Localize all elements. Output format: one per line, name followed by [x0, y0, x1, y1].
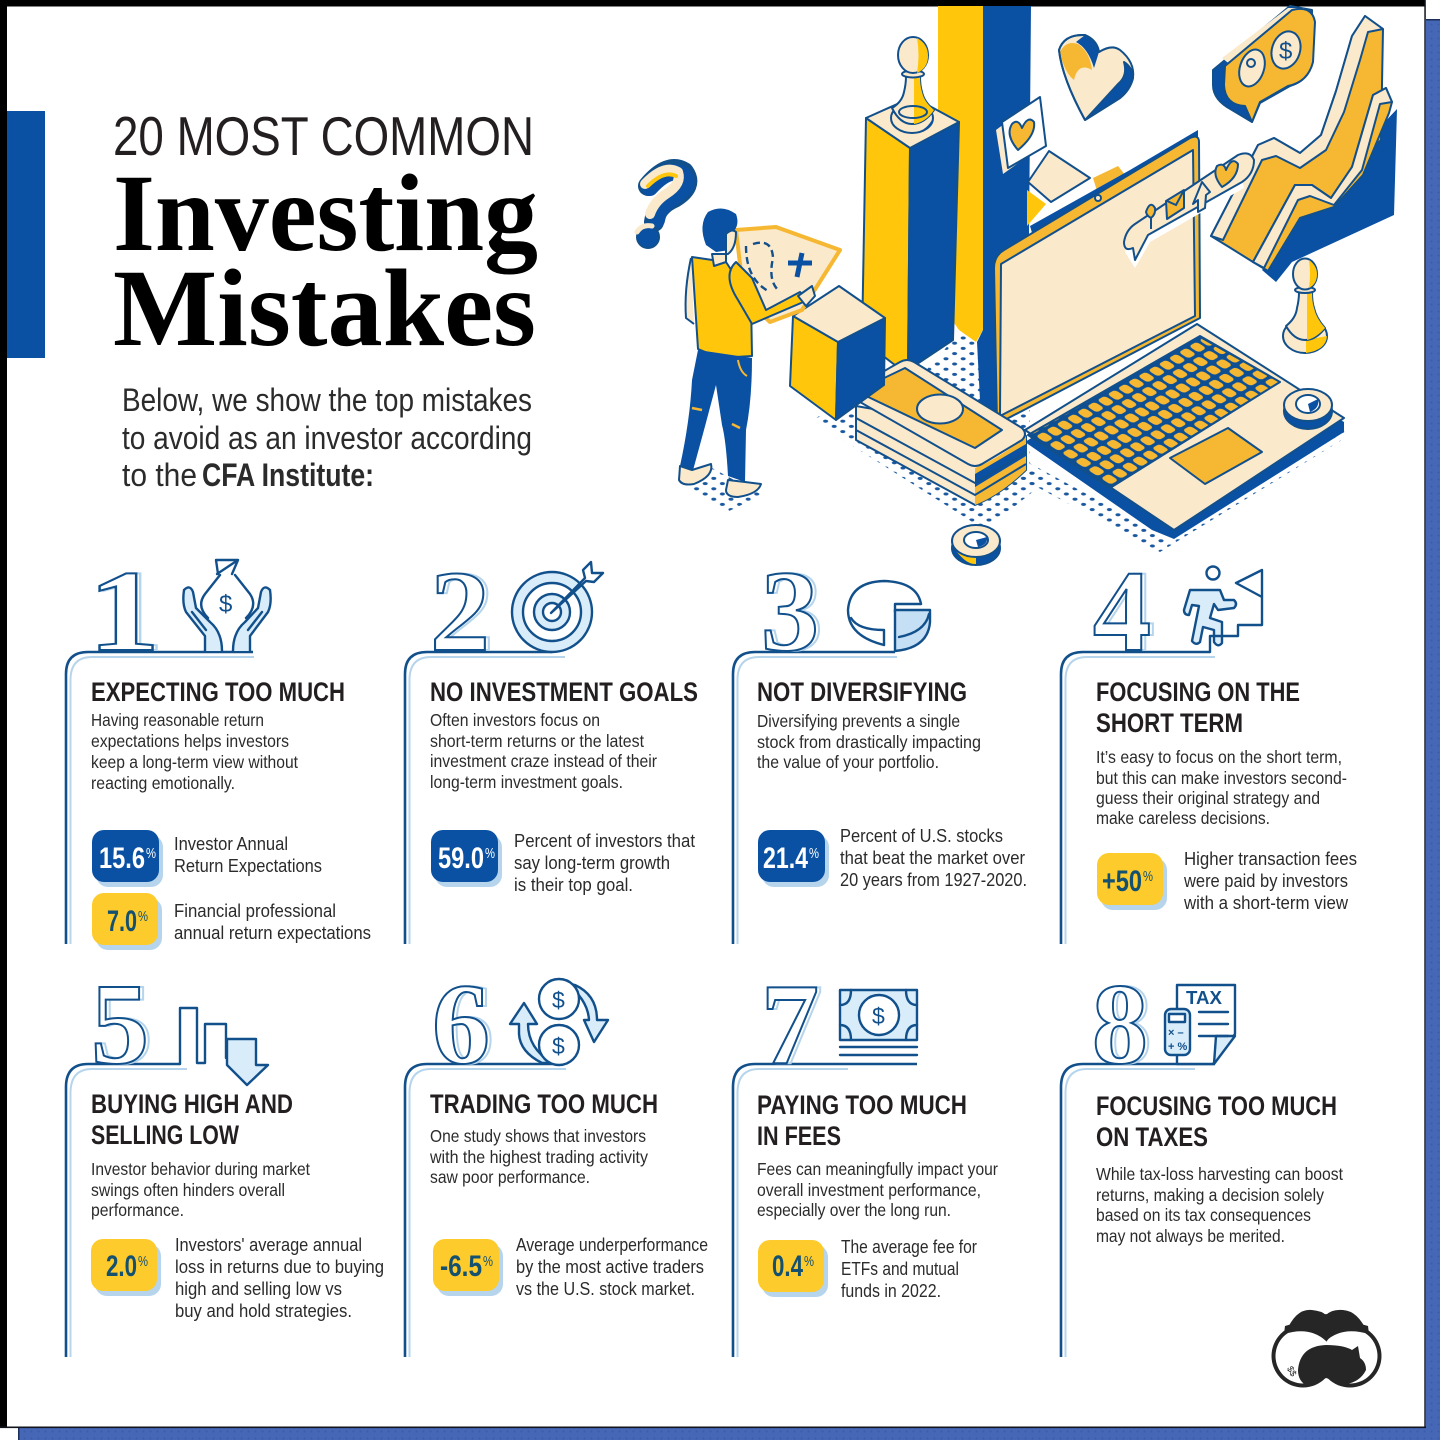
- description: but this can make investors second-: [1096, 768, 1347, 788]
- heading: NOT DIVERSIFYING: [757, 677, 967, 707]
- stat badge 7.0%: %: [138, 908, 148, 925]
- icon: tax document and calculator: + %: [1168, 1041, 1187, 1053]
- icon: hands holding money bag: [183, 560, 271, 651]
- stat badge 7.0%: [92, 893, 162, 950]
- heading: FOCUSING ON THE: [1096, 677, 1300, 707]
- description: swings often hinders overall: [91, 1180, 285, 1200]
- stat label: Return Expectations: [174, 855, 322, 876]
- description: guess their original strategy and: [1096, 788, 1320, 808]
- description: [429, 1126, 648, 1187]
- frame: [405, 652, 565, 944]
- title: Mistakes: [113, 247, 536, 369]
- description: [91, 1159, 310, 1220]
- icon: tax document and calculator: × –: [1168, 1027, 1184, 1039]
- logo: binoculars and piggy bank: [1272, 1310, 1382, 1388]
- stat badge 15.6%: 15.6: [99, 842, 145, 875]
- description: stock from drastically impacting: [757, 732, 981, 752]
- description: performance.: [91, 1200, 184, 1220]
- stat badge 7.0%: 7.0: [107, 905, 137, 938]
- stat badge +50%: %: [1143, 868, 1153, 885]
- stat badge 21.4%: %: [809, 845, 819, 862]
- front bar with pawn: [862, 97, 959, 375]
- description: Having reasonable return: [91, 710, 264, 730]
- description: Often investors focus on: [430, 710, 600, 730]
- description: investment craze instead of their: [430, 751, 657, 771]
- map: [736, 227, 840, 322]
- stat label: [840, 825, 1027, 890]
- subtitle: [122, 382, 532, 493]
- subtitle: to avoid as an investor according: [122, 420, 532, 456]
- stat label: Average underperformance: [516, 1234, 708, 1255]
- icon: circulating dollar coins: [510, 979, 608, 1065]
- stat label: funds in 2022.: [841, 1280, 941, 1301]
- frame: [1061, 652, 1215, 944]
- shoes: [679, 464, 711, 484]
- stat badge -6.5%: -6.5: [440, 1250, 482, 1283]
- stat badge 59.0%: [431, 830, 502, 887]
- stat label: [174, 833, 322, 876]
- stat label: vs the U.S. stock market.: [516, 1278, 695, 1299]
- panel: 5 buying high and selling low: [66, 961, 384, 1357]
- heading: [757, 1090, 967, 1151]
- heading: EXPECTING TOO MUCH: [91, 677, 345, 707]
- stat badge 15.6%: [92, 830, 163, 887]
- icon: banknote stack: [840, 990, 917, 1055]
- description: overall investment performance,: [757, 1180, 981, 1200]
- description: [757, 1159, 998, 1220]
- stat label: Investors' average annual: [175, 1234, 362, 1255]
- stat label: were paid by investors: [1183, 870, 1348, 891]
- stat label: [175, 1234, 384, 1321]
- stat badge -6.5%: [433, 1239, 503, 1296]
- question mark: [637, 169, 687, 248]
- tall back bar: [938, 6, 1031, 420]
- stat badge 0.4%: [758, 1240, 828, 1297]
- wave graph strips: [1211, 16, 1397, 282]
- stat label: is their top goal.: [514, 874, 633, 895]
- heading: [91, 1089, 293, 1150]
- laptop base: [1025, 324, 1344, 539]
- stat label: buy and hold strategies.: [175, 1300, 352, 1321]
- arm: [729, 262, 808, 324]
- description: long-term investment goals.: [430, 772, 623, 792]
- stat badge 21.4%: 21.4: [763, 842, 808, 875]
- description: Diversifying prevents a single: [757, 711, 960, 731]
- heading: [1096, 1091, 1337, 1152]
- numeral 1: 1: [88, 548, 160, 676]
- stat label: [514, 830, 695, 895]
- panel: 1 expecting too much: [66, 548, 371, 950]
- chat strip icons: [1124, 153, 1254, 268]
- pawn on bar: [891, 37, 934, 133]
- icon: tax document and calculator: [1165, 985, 1235, 1064]
- icon: tax document and calculator: TAX: [1186, 988, 1222, 1008]
- stat label: with a short-term view: [1183, 892, 1349, 913]
- description: [1096, 747, 1347, 828]
- numeral 4: 4: [1093, 548, 1151, 676]
- stat badge 21.4%: [758, 830, 829, 887]
- stat label: Higher transaction fees: [1184, 848, 1357, 869]
- heading: FOCUSING TOO MUCH: [1096, 1091, 1337, 1121]
- pawn right: [1283, 258, 1327, 353]
- cube: [790, 286, 885, 420]
- numeral 5: 5: [91, 961, 149, 1089]
- description: [91, 710, 298, 793]
- description: One study shows that investors: [430, 1126, 646, 1146]
- head: [702, 208, 737, 252]
- description: the value of your portfolio.: [757, 752, 939, 772]
- stat label: that beat the market over: [840, 847, 1025, 868]
- heading: IN FEES: [757, 1121, 841, 1151]
- subtitle: to the: [122, 457, 197, 493]
- accent bar: [7, 111, 45, 358]
- description: Investor behavior during market: [91, 1159, 310, 1179]
- subtitle: CFA Institute:: [202, 457, 374, 493]
- description: based on its tax consequences: [1096, 1205, 1311, 1225]
- heading: SELLING LOW: [91, 1120, 239, 1150]
- torso: [692, 257, 752, 358]
- stat label: Percent of U.S. stocks: [840, 825, 1003, 846]
- heading: NO INVESTMENT GOALS: [430, 677, 698, 707]
- description: It’s easy to focus on the short term,: [1096, 747, 1342, 767]
- panel: 3 not diversifying: [733, 548, 1027, 944]
- stat label: [516, 1234, 708, 1299]
- panel: 2 no investment goals: [405, 548, 698, 944]
- description: may not always be merited.: [1096, 1226, 1285, 1246]
- stat badge 2.0%: %: [138, 1253, 148, 1270]
- stat badge 15.6%: %: [146, 845, 156, 862]
- icon: target with arrow: [512, 562, 603, 652]
- subtitle: Below, we show the top mistakes: [122, 382, 532, 418]
- numeral 7: 7: [761, 961, 819, 1089]
- numeral 2: 2: [430, 548, 490, 676]
- stat badge -6.5%: %: [483, 1253, 493, 1270]
- description: with the highest trading activity: [429, 1147, 648, 1167]
- description: While tax-loss harvesting can boost: [1096, 1164, 1343, 1184]
- numeral 6: 6: [432, 961, 490, 1089]
- man with map: [637, 169, 840, 497]
- icon: climbing figure with flag: [1184, 566, 1262, 652]
- description: make careless decisions.: [1096, 808, 1270, 828]
- stat label: [841, 1236, 977, 1301]
- description: returns, making a decision solely: [1096, 1185, 1324, 1205]
- title: Investing: [113, 152, 538, 274]
- sticky note heart: [996, 97, 1046, 174]
- stat label: Investor Annual: [174, 833, 288, 854]
- description: expectations helps investors: [91, 731, 289, 751]
- stat label: ETFs and mutual: [841, 1258, 959, 1279]
- description: [1096, 1164, 1343, 1246]
- stat badge 2.0%: 2.0: [106, 1250, 137, 1283]
- description: keep a long-term view without: [91, 752, 298, 772]
- numeral 6: 6: [436, 961, 494, 1089]
- white box behind laptop: [1027, 130, 1198, 260]
- numeral 3: 3: [761, 548, 819, 676]
- numeral 1: 1: [92, 548, 164, 676]
- stat label: [174, 900, 371, 943]
- stat badge 0.4%: %: [804, 1253, 814, 1270]
- icon: banknote stack: $: [872, 1003, 885, 1029]
- icon: circulating dollar coins: $: [552, 987, 565, 1013]
- donut on laptop: [1284, 389, 1332, 429]
- numeral 8: 8: [1092, 961, 1148, 1089]
- map-pin and dollar chat bubble: [1213, 6, 1315, 122]
- map-pin and dollar chat bubble: $: [1279, 38, 1292, 65]
- frame: [66, 1064, 187, 1357]
- frame: [66, 652, 254, 944]
- icon: pie chart: [848, 581, 930, 651]
- description: Fees can meaningfully impact your: [757, 1159, 998, 1179]
- heading: ON TAXES: [1096, 1122, 1208, 1152]
- hero illustration: [637, 6, 1397, 565]
- heading: TRADING TOO MUCH: [430, 1089, 658, 1119]
- heading: BUYING HIGH AND: [91, 1089, 293, 1119]
- frame: [733, 1064, 917, 1357]
- logo: binoculars and piggy bank: $$: [1285, 1364, 1299, 1378]
- title: [113, 105, 538, 369]
- heart balloon: [1059, 35, 1133, 120]
- description: saw poor performance.: [430, 1167, 590, 1187]
- panel: 7 paying too much in fees: [733, 961, 998, 1357]
- panel: 6 trading too much: [405, 961, 708, 1357]
- stat label: Financial professional: [174, 900, 336, 921]
- numeral 4: 4: [1097, 548, 1155, 676]
- stat badge +50%: +50: [1102, 865, 1142, 898]
- stat label: say long-term growth: [514, 852, 670, 873]
- stat badge 0.4%: 0.4: [772, 1250, 803, 1283]
- title: 20 MOST COMMON: [113, 105, 534, 167]
- description: [757, 711, 981, 772]
- stat label: The average fee for: [841, 1236, 977, 1257]
- heading: [1096, 677, 1300, 738]
- frame: [1061, 1064, 1215, 1357]
- halftone floor dots: [682, 332, 1345, 552]
- panel: 4 focusing on the short term: [1061, 548, 1357, 944]
- description: especially over the long run.: [757, 1200, 951, 1220]
- frame: [405, 1064, 566, 1357]
- numeral 8: 8: [1096, 961, 1152, 1089]
- stat label: high and selling low vs: [175, 1278, 342, 1299]
- stat label: by the most active traders: [516, 1256, 704, 1277]
- money stack: [854, 360, 1026, 505]
- description: [430, 710, 657, 792]
- numeral 3: 3: [765, 548, 823, 676]
- numeral 7: 7: [765, 961, 823, 1089]
- laptop: [994, 137, 1344, 539]
- laptop screen: [994, 137, 1200, 424]
- numeral 2: 2: [434, 548, 494, 676]
- heading: PAYING TOO MUCH: [757, 1090, 967, 1120]
- legs: [680, 350, 752, 482]
- stat label: loss in returns due to buying: [175, 1256, 384, 1277]
- icon: hands holding money bag: $: [219, 591, 232, 618]
- stat badge 59.0%: %: [485, 845, 495, 862]
- icon: circulating dollar coins: $: [552, 1033, 565, 1059]
- stat label: 20 years from 1927-2020.: [840, 869, 1027, 890]
- donut on floor: [952, 525, 1000, 565]
- description: short-term returns or the latest: [430, 731, 644, 751]
- panel: 8 focusing too much on taxes: [1061, 961, 1343, 1357]
- stat label: [1183, 848, 1357, 913]
- stat badge +50%: [1097, 853, 1167, 910]
- frame: [733, 652, 897, 944]
- stat label: annual return expectations: [174, 922, 371, 943]
- heading: SHORT TERM: [1096, 708, 1243, 738]
- stat badge 2.0%: [91, 1239, 161, 1296]
- stat label: Percent of investors that: [514, 830, 695, 851]
- numeral 5: 5: [95, 961, 153, 1089]
- description: reacting emotionally.: [91, 773, 235, 793]
- stat badge 59.0%: 59.0: [438, 842, 484, 875]
- icon: falling bars with arrow: [180, 1008, 268, 1085]
